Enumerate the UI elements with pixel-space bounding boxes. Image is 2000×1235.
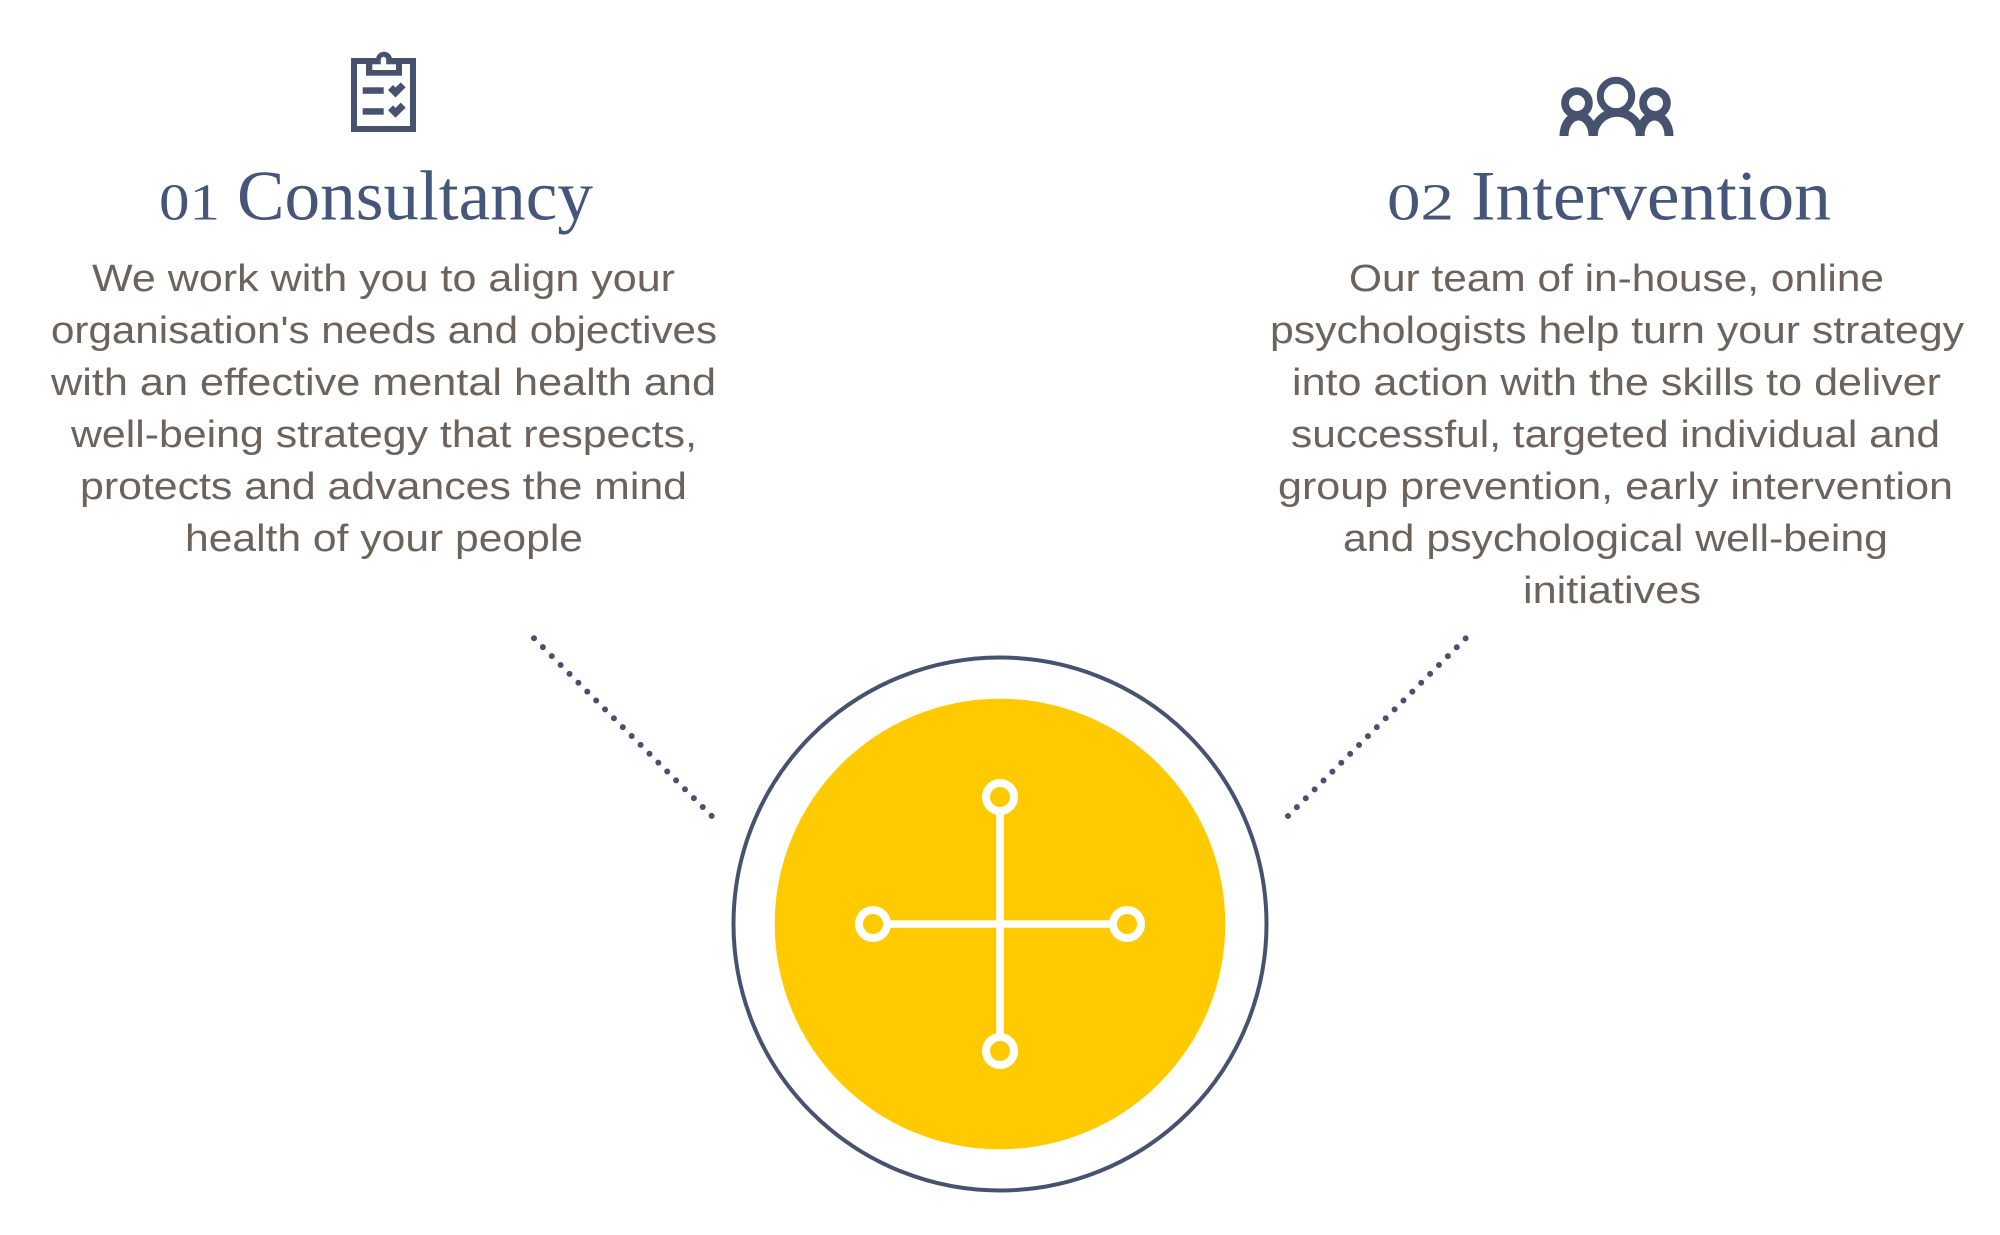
text block: intervention description: successful, targeted individual and [1291,414,1940,456]
yellow disc [775,699,1225,1149]
text block: intervention description: psychologists help turn your strategy [1270,310,1964,352]
central hub diagram [734,658,1266,1190]
text block: consultancy description: protects and advances the mind [80,466,687,508]
text block: intervention description: group prevention, early intervention [1278,466,1953,508]
icon: clipboard checklist [354,52,413,129]
heading: 02 Intervention: 02 [1387,174,1454,232]
text block: intervention description: Our team of in-house, online [1349,258,1884,300]
dotted connector: right [1288,638,1466,816]
text block: intervention description: into action with the skills to deliver [1292,362,1941,404]
panel: intervention [1270,80,1964,612]
text block: intervention description: and psychological well-being [1343,518,1888,560]
text block: consultancy description: with an effective mental health and [50,362,716,404]
text block: consultancy description [50,258,717,560]
text block: consultancy description: well-being strategy that respects, [70,414,697,456]
heading: 01 Consultancy: 01 [159,174,220,232]
text block: consultancy description: health of your people [185,518,583,560]
heading: 02 Intervention: Intervention [1471,158,1831,236]
heading: 01 Consultancy: Consultancy [237,158,593,236]
panel: consultancy [50,52,717,560]
text block: intervention description: initiatives [1523,570,1701,612]
outer ring [734,658,1266,1190]
text block: intervention description [1270,258,1964,612]
text block: consultancy description: We work with you to align your [92,258,675,300]
dotted connector: left [534,638,712,816]
icon: group of people [1564,80,1669,136]
icon: cross with four nodes [859,783,1141,1065]
text block: consultancy description: organisation's needs and objectives [51,310,717,352]
